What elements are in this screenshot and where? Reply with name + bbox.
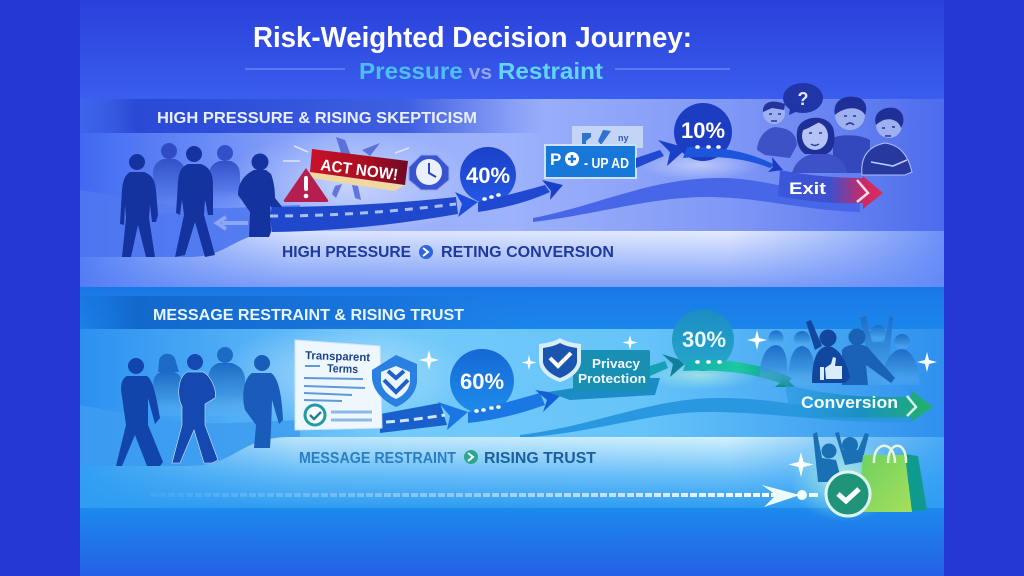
- trailing dash: [809, 493, 818, 497]
- back person: [759, 330, 788, 385]
- exit arrow: [778, 170, 883, 209]
- journey arc: [683, 147, 783, 172]
- card: privacy protection: [573, 350, 650, 391]
- leading person head: [252, 154, 268, 170]
- arrow head: [775, 374, 795, 387]
- front card text: - UP AD: [584, 156, 629, 172]
- icon: success check: [826, 472, 870, 516]
- band: [683, 147, 775, 168]
- arrow head: [455, 192, 478, 217]
- group: celebrating shoppers: [813, 432, 869, 482]
- strip label: [299, 450, 596, 467]
- front person head: [129, 154, 145, 170]
- label right: RETING CONVERSION: [441, 244, 614, 261]
- arrow head: [662, 354, 687, 377]
- band and head: [785, 384, 933, 422]
- doc title line 2: Terms: [327, 363, 358, 376]
- box: [573, 350, 650, 391]
- glow under arc: [640, 360, 760, 390]
- icon: popup ads: [545, 126, 643, 178]
- conversion arrow: [785, 384, 933, 422]
- banner body: [310, 149, 408, 185]
- strip: [80, 231, 944, 287]
- band: [683, 360, 792, 385]
- bag front: [858, 455, 912, 512]
- subtitle: Pressure vs Restraint: [359, 58, 603, 84]
- label left: HIGH PRESSURE: [282, 244, 411, 261]
- arrow head: [762, 485, 800, 507]
- value: 40%: [466, 163, 510, 188]
- panel background: [80, 99, 944, 264]
- shopper: [835, 432, 869, 465]
- stat: 10 percent: [674, 103, 732, 161]
- subtitle rules: [245, 68, 730, 70]
- journey arrow 2: [478, 180, 563, 212]
- back card glyphs: [582, 130, 611, 145]
- speech bubble: ?: [798, 89, 808, 109]
- success glow: [790, 438, 900, 522]
- arrow head: [658, 140, 687, 166]
- sparkles: [419, 330, 937, 372]
- man with crossed arms: [862, 108, 912, 175]
- label: Conversion: [801, 393, 898, 412]
- stars: [484, 195, 499, 199]
- dark burst behind banner: [332, 137, 380, 200]
- warning burst: [283, 146, 409, 161]
- strip: [80, 437, 944, 508]
- document: transparent terms: [295, 340, 382, 430]
- back card: [572, 126, 643, 148]
- icon: warning triangle: [284, 168, 328, 202]
- label left: MESSAGE RESTRAINT: [299, 450, 456, 467]
- handles: [874, 446, 906, 463]
- icon: arrow badge: [464, 450, 478, 464]
- walking person head: [254, 355, 270, 371]
- value: 60%: [460, 369, 504, 394]
- walking person: [243, 373, 283, 448]
- front card letter: P: [550, 150, 561, 169]
- top band: [80, 287, 944, 329]
- band and head: [778, 170, 883, 209]
- person raising arm: [842, 328, 895, 385]
- front person: [120, 172, 158, 257]
- shopper: [813, 432, 842, 482]
- label line 2: Protection: [578, 371, 646, 386]
- stat: 30 percent: [672, 309, 734, 371]
- glow under arc: [640, 150, 760, 180]
- back person: [153, 354, 182, 416]
- cheering person: [860, 316, 893, 385]
- panel background: [80, 329, 944, 471]
- icon: privacy shield: [539, 338, 581, 382]
- icon: shopping bag: [858, 446, 927, 512]
- value: 30%: [682, 327, 726, 352]
- speech bubble: [783, 83, 823, 115]
- person with thumbs up: [806, 320, 850, 383]
- journey arc: [683, 360, 795, 387]
- left wave: [80, 190, 300, 260]
- stat: 40 percent: [460, 147, 516, 203]
- stars: [697, 145, 719, 149]
- chevron: [907, 396, 916, 416]
- group: people under pressure: [120, 143, 287, 257]
- heading: HIGH PRESSURE & RISING SKEPTICISM: [157, 110, 477, 127]
- sparkle: [788, 452, 814, 477]
- circle: [674, 103, 732, 161]
- group: calm walkers: [116, 347, 283, 466]
- band: [650, 361, 668, 376]
- dashes: [150, 493, 790, 497]
- glow: [220, 130, 480, 240]
- stars: [476, 407, 499, 411]
- bottom band: [80, 508, 944, 576]
- circle: [450, 349, 514, 413]
- main title: Risk-Weighted Decision Journey:: [253, 22, 692, 54]
- chevron: [857, 180, 868, 202]
- banner underside: [310, 172, 405, 191]
- doc lines: [304, 366, 365, 401]
- doc title: Transparent: [305, 350, 370, 364]
- person with angry look: [757, 102, 797, 158]
- strip label: [282, 244, 614, 261]
- icon: arrow badge: [419, 245, 433, 259]
- arrow head: [438, 402, 468, 430]
- banner text: ACT NOW!: [319, 157, 399, 184]
- label right: RISING TRUST: [484, 450, 596, 467]
- front card: [545, 145, 636, 178]
- group: skeptical people: [757, 83, 912, 175]
- callout: act now banner: [310, 149, 408, 191]
- dashed centre: [386, 415, 445, 422]
- heading bar: [80, 296, 545, 329]
- heading: MESSAGE RESTRAINT & RISING TRUST: [153, 307, 464, 324]
- back person: [208, 347, 245, 416]
- strip side tint: [80, 231, 944, 287]
- arrow head: [535, 390, 562, 412]
- front person: [175, 164, 215, 257]
- band: [636, 150, 664, 168]
- icon: thumbs up: [820, 357, 842, 380]
- bag side: [905, 454, 927, 512]
- value: 10%: [681, 118, 725, 143]
- distant wave: [533, 178, 860, 222]
- icon: shield: [372, 355, 417, 407]
- strip side tint: [80, 437, 944, 508]
- dashed centre: [270, 204, 456, 216]
- heading bar: [80, 99, 545, 133]
- woman: [792, 118, 847, 173]
- glow: [210, 325, 470, 425]
- band: [380, 403, 447, 433]
- back person with hat: [788, 331, 815, 385]
- person with crossed arms: [172, 372, 218, 463]
- panel: message restraint: [80, 287, 944, 576]
- circle: [672, 309, 734, 371]
- back card inner panel text: ny: [618, 133, 629, 143]
- label: Privacy: [592, 356, 641, 371]
- road band: [270, 197, 458, 232]
- arrow head: [768, 157, 783, 172]
- journey arrow 2: [468, 390, 562, 423]
- person with crossed arms head: [187, 354, 203, 370]
- walking person: [116, 376, 163, 466]
- dashed success path: [150, 485, 818, 507]
- back person: [153, 143, 185, 214]
- walking person head: [128, 358, 144, 374]
- stars: [697, 360, 720, 364]
- journey arrow 3: [650, 354, 687, 377]
- journey arrow 1: [380, 402, 468, 433]
- node: [797, 490, 807, 500]
- group: happy crowd: [759, 316, 920, 385]
- back person: [209, 145, 240, 208]
- backward arrow: [217, 217, 248, 229]
- circle: [460, 147, 516, 203]
- central panel background: [80, 0, 944, 100]
- band: [478, 185, 550, 212]
- distant wave: [520, 398, 912, 438]
- leading person reaching: [238, 170, 287, 237]
- band: [468, 393, 545, 423]
- plus icon: [565, 152, 579, 166]
- sheet: [295, 340, 382, 430]
- privacy band: [548, 378, 660, 400]
- front person head: [186, 146, 202, 162]
- label: Exit: [789, 179, 826, 198]
- panel: high pressure: [80, 83, 944, 287]
- journey arrow 1: [270, 192, 478, 232]
- lines: [331, 412, 372, 420]
- title block: [245, 22, 730, 84]
- journey arrow 3: [636, 140, 687, 168]
- check badge: [305, 405, 325, 425]
- sad man: [833, 97, 870, 173]
- arrow head: [542, 180, 563, 200]
- back person: [881, 334, 920, 385]
- stat: 60 percent: [450, 349, 514, 413]
- icon: clock: [409, 155, 449, 190]
- left wave: [80, 405, 300, 470]
